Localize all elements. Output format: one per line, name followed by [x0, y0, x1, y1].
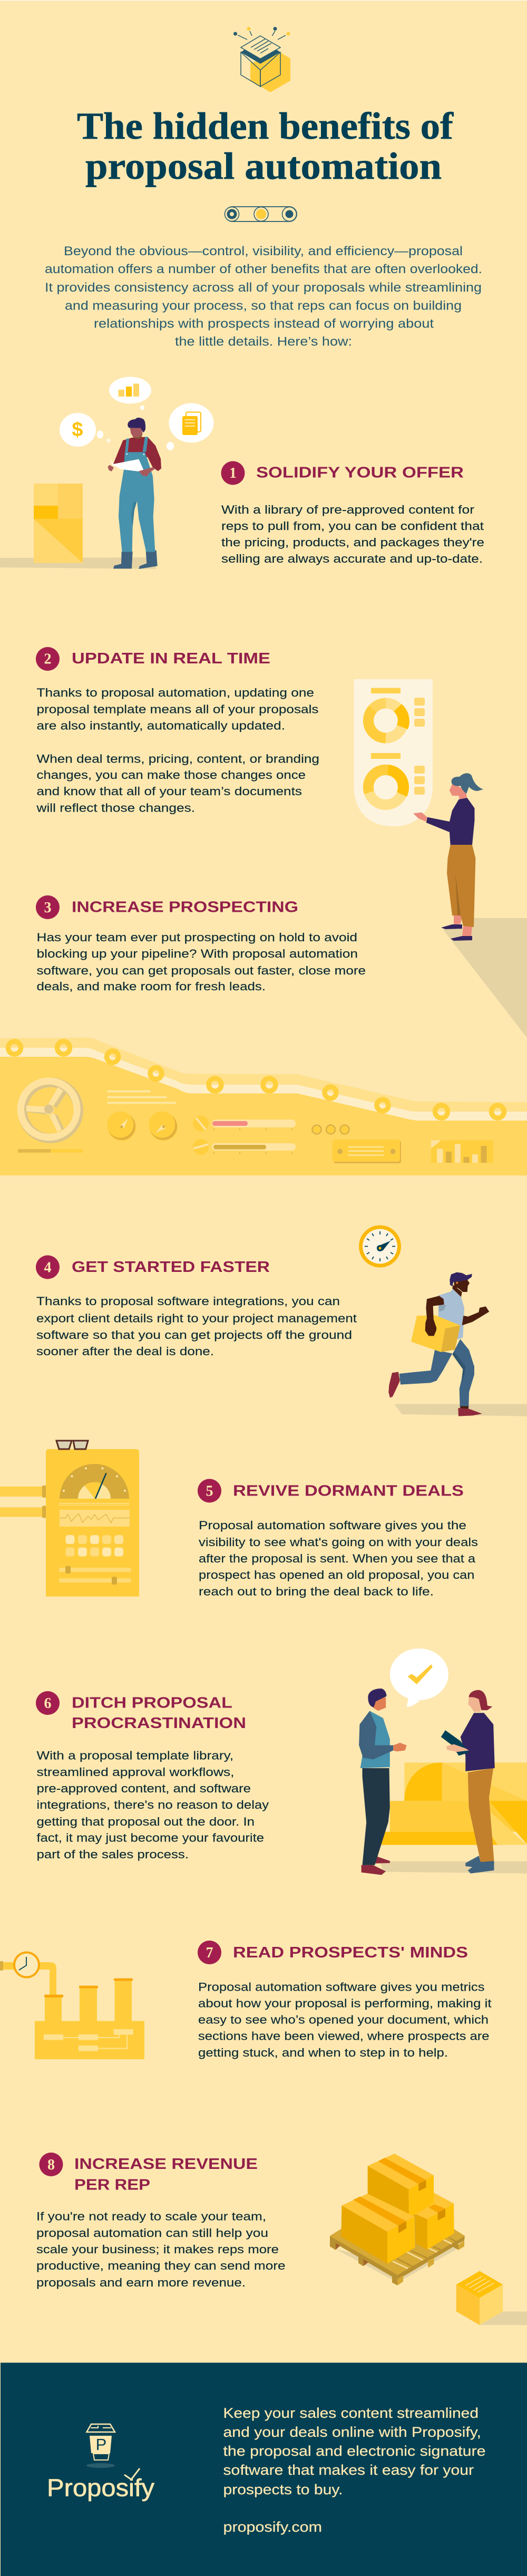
- top box: [368, 2154, 434, 2218]
- section 8: increase revenue per rep: INCREASE REVENUE: [74, 2156, 258, 2173]
- speech bubble with check: [390, 1648, 448, 1707]
- section 3: increase prospecting: blocking up your pipeline? With proposal automation: [37, 947, 358, 960]
- section 7: read prospects' minds: READ PROSPECTS' MINDS: [233, 1944, 468, 1961]
- section 3: increase prospecting: [36, 895, 366, 993]
- section 1: solidify your offer: [221, 461, 484, 565]
- clock: [13, 1951, 40, 1979]
- man figure: [359, 1689, 407, 1875]
- title: [77, 105, 454, 187]
- section 7: read prospects' minds: about how your proposal is performing, making it: [198, 1996, 491, 2010]
- logo: Proposify cup: [47, 2424, 154, 2502]
- section 8: increase revenue per rep: scale your business; it makes reps more: [36, 2243, 279, 2256]
- thought bubble: chart: [109, 377, 151, 410]
- section 1: solidify your offer: reps to pull from, you can be confident that: [221, 519, 484, 533]
- thought bubble: dollar: [60, 413, 111, 447]
- icon: document dropping into box: [233, 27, 290, 92]
- section 5: revive dormant deals: REVIVE DORMANT DEALS: [233, 1483, 464, 1500]
- thought bubble: document: [167, 403, 214, 450]
- rollers: [8, 1041, 504, 1118]
- section 1: solidify your offer: 1: [229, 465, 237, 481]
- section 6: ditch proposal procrastination: fact, it may just become your favourite: [37, 1831, 264, 1845]
- section 6: ditch proposal procrastination: [36, 1691, 269, 1861]
- section 5: revive dormant deals: 5: [206, 1483, 213, 1500]
- woman figure: [441, 1690, 495, 1874]
- small document box: [456, 2271, 527, 2325]
- conveyor bands and machine body: [0, 1038, 527, 1175]
- section 7: read prospects' minds: 7: [206, 1945, 213, 1961]
- intro text: the little details. Here’s how:: [175, 334, 352, 349]
- section 3: increase prospecting: INCREASE PROSPECTING: [72, 899, 298, 915]
- section 4: get started faster: GET STARTED FASTER: [72, 1259, 270, 1276]
- title: proposal automation: [85, 145, 442, 187]
- intro text: and measuring your process, so that reps can focus on building: [65, 298, 462, 313]
- background shapes: [380, 1762, 527, 1874]
- section 8: increase revenue per rep: [36, 2153, 286, 2289]
- section 3: increase prospecting: 3: [44, 900, 52, 916]
- call to action text: proposify.com: [223, 2519, 322, 2535]
- section 7: read prospects' minds: getting stuck, and when to step in to help.: [198, 2046, 448, 2059]
- illustration: factory with clock: [0, 1951, 144, 2059]
- sliders: [59, 1566, 131, 1585]
- section 4: get started faster: [36, 1255, 357, 1358]
- call to action text: prospects to buy.: [223, 2482, 343, 2497]
- section 6: ditch proposal procrastination: integrations, there's no reason to delay: [37, 1798, 269, 1811]
- call to action text: [223, 2405, 486, 2535]
- slider gauges: [193, 1116, 296, 1155]
- section 2: update in real time: are also instantly, automatically updated.: [37, 719, 285, 732]
- section 2: update in real time: 2: [44, 651, 52, 668]
- section 7: read prospects' minds: easy to see who’s opened your document, which: [198, 2013, 489, 2026]
- glasses: [56, 1441, 88, 1449]
- steering wheel and dials: [17, 1077, 178, 1153]
- section 6: ditch proposal procrastination: part of the sales process.: [37, 1848, 189, 1861]
- intro text: automation offers a number of other benefits that are often overlooked.: [45, 262, 482, 276]
- keypad: [65, 1535, 123, 1557]
- section 7: read prospects' minds: Proposal automation software gives you metrics: [198, 1981, 485, 1993]
- illustration: conveyor machine: [0, 1038, 527, 1175]
- section 6: ditch proposal procrastination: With a proposal template library,: [37, 1749, 233, 1762]
- front box: [341, 2194, 415, 2264]
- section 3: increase prospecting: software, you can get proposals out faster, close more: [37, 964, 366, 977]
- illustration: woman pointing at report panel: [354, 679, 527, 1038]
- footer panel: [1, 2362, 527, 2576]
- section 6: ditch proposal procrastination: DITCH PROPOSAL: [72, 1695, 232, 1712]
- section 1: solidify your offer: With a library of pre-approved content for: [221, 503, 474, 516]
- section 5: revive dormant deals: [198, 1479, 478, 1598]
- call to action text: Keep your sales content streamlined: [223, 2405, 479, 2421]
- section 5: revive dormant deals: reach out to bring the deal back to life.: [199, 1585, 434, 1598]
- section 5: revive dormant deals: prospect has opened an old proposal, you can: [199, 1568, 474, 1581]
- logo: Proposify cup: P: [96, 2435, 106, 2454]
- call to action text: the proposal and electronic signature: [223, 2443, 486, 2459]
- section 5: revive dormant deals: visibility to see what's going on with your deals: [199, 1536, 478, 1549]
- call to action text: and your deals online with Proposify,: [223, 2424, 481, 2440]
- logo: Proposify cup: Proposify: [47, 2474, 154, 2502]
- nameplate: [333, 1140, 401, 1163]
- woman figure: [413, 773, 483, 941]
- section 2: update in real time: proposal template means all of your proposals: [37, 702, 318, 716]
- section 8: increase revenue per rep: If you're not ready to scale your team,: [36, 2210, 266, 2223]
- section 4: get started faster: export client details right to your project management: [36, 1312, 357, 1325]
- section 3: increase prospecting: deals, and make room for fresh leads.: [37, 980, 266, 993]
- section 4: get started faster: software so that you can get projects off the ground: [36, 1328, 352, 1342]
- worker figure: [108, 418, 161, 569]
- section 6: ditch proposal procrastination: PROCRASTINATION: [72, 1715, 246, 1732]
- section 4: get started faster: Thanks to proposal software integrations, you can: [36, 1295, 340, 1308]
- thought bubble: dollar: $: [72, 419, 83, 441]
- intro text: Beyond the obvious—control, visibility, and efficiency—proposal: [64, 244, 463, 258]
- section 1: solidify your offer: selling are always accurate and up-to-date.: [221, 552, 483, 565]
- icon: stopwatch: [359, 1226, 401, 1268]
- report panel with donut charts: [354, 679, 433, 826]
- section 2: update in real time: will reflect those changes.: [36, 802, 195, 814]
- indicator lights: [312, 1125, 349, 1134]
- section 6: ditch proposal procrastination: 6: [44, 1695, 52, 1712]
- section 3: increase prospecting: Has your team ever put prospecting on hold to avoid: [37, 931, 357, 944]
- section 4: get started faster: 4: [44, 1259, 52, 1276]
- pallet: [330, 2194, 465, 2285]
- section 5: revive dormant deals: after the proposal is sent. When you see that a: [199, 1552, 476, 1565]
- gauge: [60, 1464, 129, 1499]
- section 2: update in real time: and know that all of your team’s documents: [37, 785, 302, 798]
- section 7: read prospects' minds: sections have been viewed, where prospects are: [198, 2029, 489, 2043]
- signal graph: [60, 1510, 130, 1527]
- section 2: update in real time: Thanks to proposal automation, updating one: [37, 686, 314, 699]
- section 2: update in real time: UPDATE IN REAL TIME: [72, 650, 270, 667]
- title: The hidden benefits of: [77, 105, 454, 147]
- section 6: ditch proposal procrastination: getting that proposal out the door. In: [37, 1815, 255, 1828]
- section 1: solidify your offer: SOLIDIFY YOUR OFFER: [256, 464, 464, 481]
- section 8: increase revenue per rep: 8: [47, 2157, 55, 2173]
- call to action text: software that makes it easy for your: [223, 2462, 474, 2478]
- section 8: increase revenue per rep: productive, meaning they can send more: [36, 2259, 286, 2272]
- illustration: boxes on pallet: [330, 2154, 527, 2325]
- pipes: [0, 1485, 46, 1518]
- section 8: increase revenue per rep: PER REP: [74, 2177, 150, 2194]
- intro text: [45, 244, 482, 349]
- section 1: solidify your offer: the pricing, products, and packages they're: [221, 536, 484, 549]
- section 8: increase revenue per rep: proposal automation can still help you: [36, 2226, 268, 2240]
- intro text: relationships with prospects instead of worrying about: [94, 316, 434, 331]
- icon: conveyor rollers: [225, 207, 297, 221]
- section 8: increase revenue per rep: proposals and earn more revenue.: [36, 2276, 246, 2289]
- intro text: It provides consistency across all of your proposals while streamlining: [45, 281, 482, 295]
- section 7: read prospects' minds: [198, 1941, 491, 2059]
- boxes stack: [34, 484, 83, 563]
- bar chart panel: [431, 1140, 493, 1163]
- illustration: runner carrying a box: [388, 1272, 527, 1416]
- section 2: update in real time: When deal terms, pricing, content, or branding: [37, 752, 319, 766]
- section 6: ditch proposal procrastination: pre-approved content, and software: [37, 1782, 251, 1795]
- illustration: two colleagues talking: [359, 1648, 527, 1875]
- right box: [415, 2193, 454, 2250]
- illustration: worker with overalls and thought bubbles: [0, 377, 214, 569]
- section 4: get started faster: sooner after the deal is done.: [36, 1345, 214, 1358]
- section 2: update in real time: changes, you can make those changes once: [37, 768, 306, 782]
- illustration: monitoring machine with glasses: [0, 1441, 139, 1597]
- factory building: [35, 1979, 144, 2059]
- section 6: ditch proposal procrastination: streamlined approval workflows,: [37, 1765, 234, 1779]
- section 2: update in real time: [36, 647, 319, 814]
- section 5: revive dormant deals: Proposal automation software gives you the: [199, 1519, 466, 1532]
